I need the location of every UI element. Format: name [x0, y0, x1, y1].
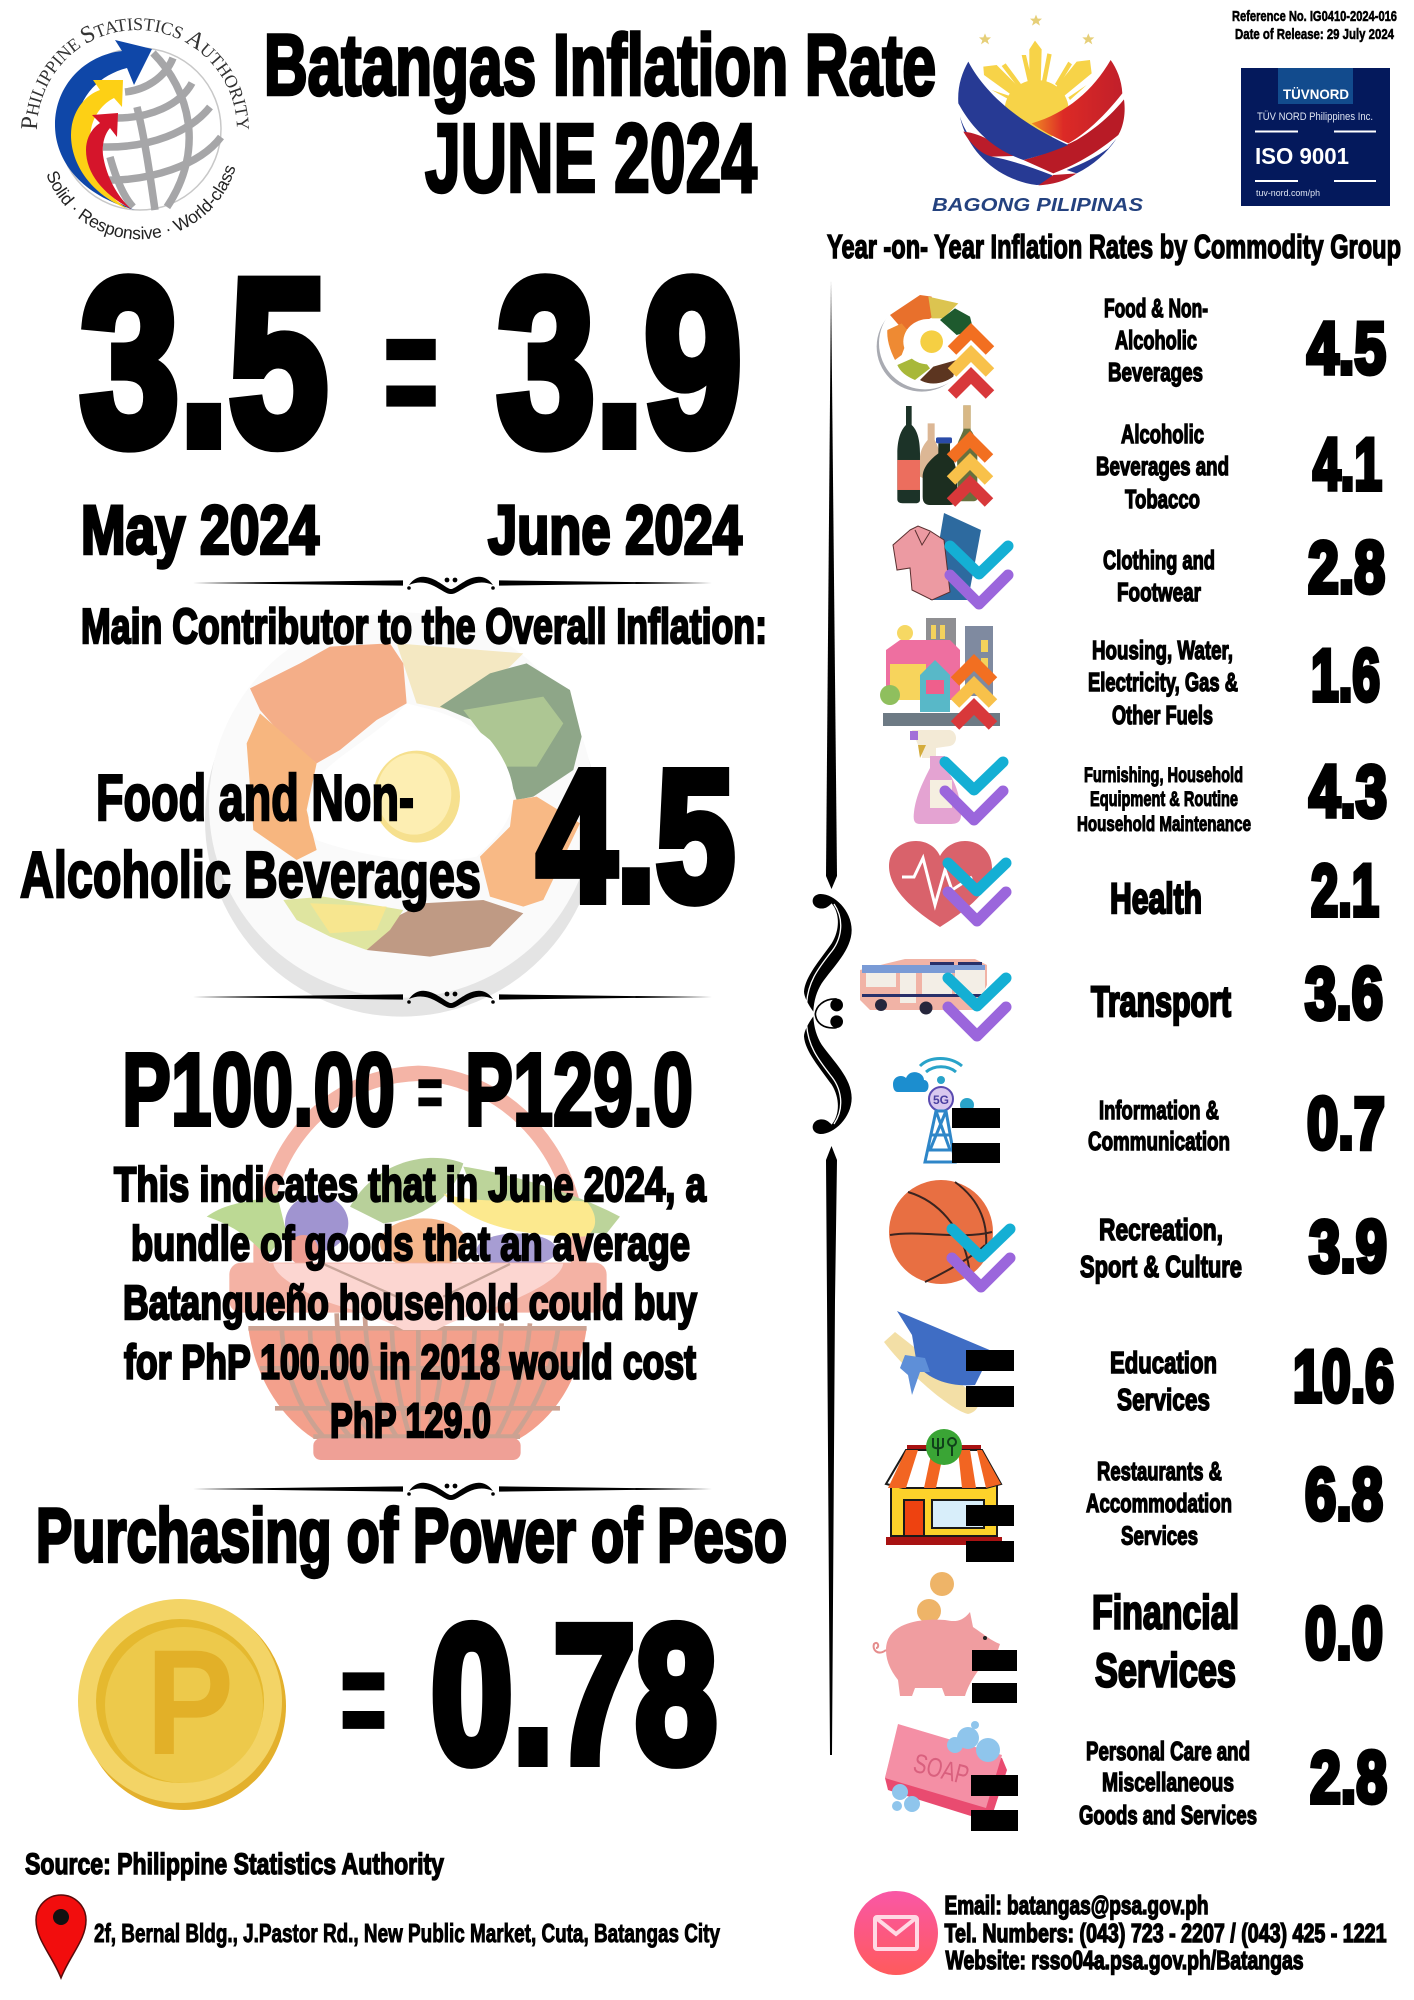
peso equivalence: = — [417, 1054, 443, 1130]
main contributor value: Food and Non- — [96, 761, 414, 834]
label: Transport — [1091, 978, 1231, 1026]
row: financial services — [874, 1572, 1383, 1703]
explanatory paragraph: bundle of goods that an average — [131, 1218, 690, 1271]
icon: equal status — [966, 1350, 1014, 1407]
source note: Source: Philippine Statistics Authority — [25, 1848, 444, 1881]
explanatory paragraph: PhP 129.0 — [330, 1395, 491, 1448]
value: 6.8 — [1305, 1454, 1383, 1536]
row: housing, water, electricity, gas and other fuels — [880, 618, 1380, 730]
row: personal care and miscellaneous — [885, 1721, 1387, 1831]
row: health — [889, 841, 1379, 932]
explanatory paragraph — [114, 1159, 706, 1448]
scroll ornament — [804, 894, 852, 1134]
value: 3.9 — [1309, 1206, 1387, 1288]
logo: Philippine Statistics Authority — [21, 18, 249, 240]
icon: buildings — [880, 618, 1000, 726]
value: 4.5 — [1307, 308, 1386, 390]
logo ring text: motto: Solid · Responsive · World-class — [47, 166, 235, 240]
value: 2.1 — [1311, 850, 1379, 932]
label: Beverages and — [1096, 451, 1229, 481]
icon: restaurant storefront — [886, 1429, 1002, 1545]
label — [1110, 1345, 1217, 1417]
value: 4.3 — [1309, 752, 1387, 832]
heading: main contributor: Main Contributor to the Overall Inflation: — [81, 600, 767, 654]
label: Recreation, — [1099, 1212, 1223, 1247]
label — [1088, 1095, 1230, 1156]
office address: 2f, Bernal Bldg., J.Pastor Rd., New Public Market, Cuta, Batangas City — [94, 1918, 720, 1948]
icon: bottles — [897, 405, 977, 505]
vertical scroll divider — [804, 280, 852, 1755]
label — [1088, 635, 1238, 730]
background watermark: fruit basket — [207, 1073, 620, 1460]
label — [1080, 1212, 1242, 1284]
label: Food & Non- — [1104, 293, 1208, 323]
title: JUNE 2024 — [425, 104, 757, 212]
label: Miscellaneous — [1102, 1767, 1234, 1797]
label: Restaurants & — [1097, 1456, 1222, 1486]
icon: equal status — [966, 1505, 1014, 1562]
ISO 9001 certification badge: tuv-nord.com/ph — [1256, 188, 1320, 198]
label: Personal Care and — [1086, 1736, 1250, 1766]
heading: purchasing power: Purchasing of Power of Peso — [36, 1494, 787, 1578]
icon: email envelope — [854, 1891, 938, 1975]
main contributor value: Alcoholic Beverages — [20, 838, 481, 911]
label: Alcoholic — [1121, 419, 1204, 449]
contact details: Email: batangas@psa.gov.ph — [944, 1890, 1208, 1920]
purchasing power value: = — [340, 1620, 387, 1779]
label: Health — [1110, 875, 1202, 923]
label: Accommodation — [1086, 1488, 1232, 1518]
label — [1092, 1586, 1239, 1696]
label: Communication — [1088, 1126, 1230, 1156]
label: Services — [1121, 1520, 1198, 1550]
ISO 9001 certification badge: ISO 9001 — [1255, 143, 1349, 169]
value: 2.8 — [1308, 528, 1385, 608]
label: Electricity, Gas & — [1088, 667, 1238, 697]
contact details: Website: rsso04a.psa.gov.ph/Batangas — [946, 1945, 1304, 1975]
icon: location pin — [36, 1895, 86, 1978]
icon: piggy bank — [874, 1572, 1000, 1696]
label: Financial — [1092, 1586, 1239, 1638]
icon: equal status — [972, 1650, 1017, 1703]
contact details — [944, 1890, 1386, 1975]
overall rate comparison: 3.9 — [497, 231, 742, 495]
icon: heart with pulse — [889, 841, 992, 927]
icon: soap bar — [885, 1721, 1007, 1822]
label: Goods and Services — [1079, 1800, 1257, 1830]
icon: equal status — [952, 1108, 1000, 1163]
row: information and communication — [893, 1058, 1385, 1164]
peso equivalence: P129.0 — [465, 1032, 693, 1147]
row: education services — [884, 1311, 1394, 1418]
explanatory paragraph: Batangueño household could buy — [123, 1277, 697, 1330]
title — [264, 18, 936, 212]
label: Equipment & Routine — [1090, 788, 1238, 811]
label — [1096, 419, 1229, 514]
label: Services — [1095, 1644, 1236, 1696]
overall rate comparison: May 2024 — [81, 492, 319, 568]
logo: Bagong Pilipinas — [932, 15, 1143, 215]
overall rate comparison: June 2024 — [488, 492, 742, 568]
icon: 5G tower — [893, 1058, 974, 1162]
label: Services — [1117, 1382, 1210, 1417]
icon: food plate — [877, 295, 973, 392]
value: 0.7 — [1307, 1084, 1385, 1164]
icon: peso coin — [78, 1599, 286, 1810]
label: Furnishing, Household — [1084, 764, 1243, 787]
icon: basketball — [889, 1180, 993, 1284]
label — [1077, 764, 1251, 836]
value: 4.1 — [1313, 424, 1382, 506]
label: Education — [1110, 1345, 1217, 1380]
value: 1.6 — [1311, 636, 1380, 716]
peso equivalence — [122, 1032, 693, 1147]
row: alcoholic beverages and tobacco — [897, 405, 1382, 514]
icon: 5G tower: 5G — [933, 1093, 949, 1107]
icon: bus — [860, 959, 987, 1014]
overall rate comparison: = — [383, 273, 439, 467]
value: 2.8 — [1310, 1738, 1387, 1818]
logo ring text: agency name: PHILIPPINE STATISTICS AUTHORITY — [21, 18, 249, 130]
label: Sport & Culture — [1080, 1249, 1242, 1284]
row: furnishing and household maintenance — [910, 730, 1387, 836]
label: Information & — [1099, 1095, 1219, 1125]
ISO 9001 certification badge — [1241, 68, 1390, 206]
row: food and non-alcoholic beverages — [877, 293, 1386, 394]
label — [1086, 1456, 1232, 1550]
label: Alcoholic — [1115, 325, 1197, 355]
purchasing power value: 0.78 — [431, 1586, 717, 1804]
row: clothing and footwear — [893, 513, 1385, 608]
value: 3.6 — [1305, 954, 1383, 1034]
main contributor value — [20, 733, 735, 940]
label: Clothing and — [1103, 545, 1215, 575]
label: Other Fuels — [1112, 700, 1213, 730]
label — [1103, 545, 1215, 607]
icon: soap bar: SOAP — [910, 1748, 972, 1791]
label — [1104, 293, 1208, 387]
icon: spray bottle — [910, 730, 961, 824]
icon: peso coin: P — [146, 1618, 234, 1786]
label — [1079, 1736, 1257, 1830]
explanatory paragraph: for PhP 100.00 in 2018 would cost — [124, 1336, 696, 1390]
label: Beverages — [1108, 357, 1203, 387]
title: Batangas Inflation Rate — [264, 18, 936, 114]
row: transport — [860, 954, 1383, 1036]
value: 0.0 — [1305, 1594, 1383, 1674]
reference number and release date — [1232, 8, 1397, 43]
row: restaurants and accommodation services — [886, 1429, 1383, 1562]
label: Tobacco — [1125, 484, 1200, 514]
label: Footwear — [1117, 577, 1201, 607]
label: Housing, Water, — [1092, 635, 1233, 665]
icon: graduation cap and diploma — [884, 1311, 992, 1414]
background watermark: food plate — [205, 612, 598, 1017]
row: recreation, sport and culture — [889, 1180, 1387, 1288]
main contributor value: 4.5 — [537, 733, 735, 940]
logo wordmark: BAGONG PILIPINAS — [932, 195, 1143, 215]
ISO 9001 certification badge: TÜVNORD — [1283, 86, 1349, 102]
overall rate comparison — [80, 231, 742, 568]
label: Household Maintenance — [1077, 813, 1251, 836]
icon: equal status — [971, 1775, 1018, 1831]
overall rate comparison: 3.5 — [80, 231, 328, 495]
ISO 9001 certification badge: TÜV NORD Philippines Inc. — [1257, 111, 1373, 123]
icon: shirt and jeans — [893, 513, 981, 600]
explanatory paragraph: This indicates that in June 2024, a — [114, 1159, 706, 1212]
purchasing power value — [340, 1586, 717, 1804]
peso equivalence: P100.00 — [122, 1032, 395, 1147]
